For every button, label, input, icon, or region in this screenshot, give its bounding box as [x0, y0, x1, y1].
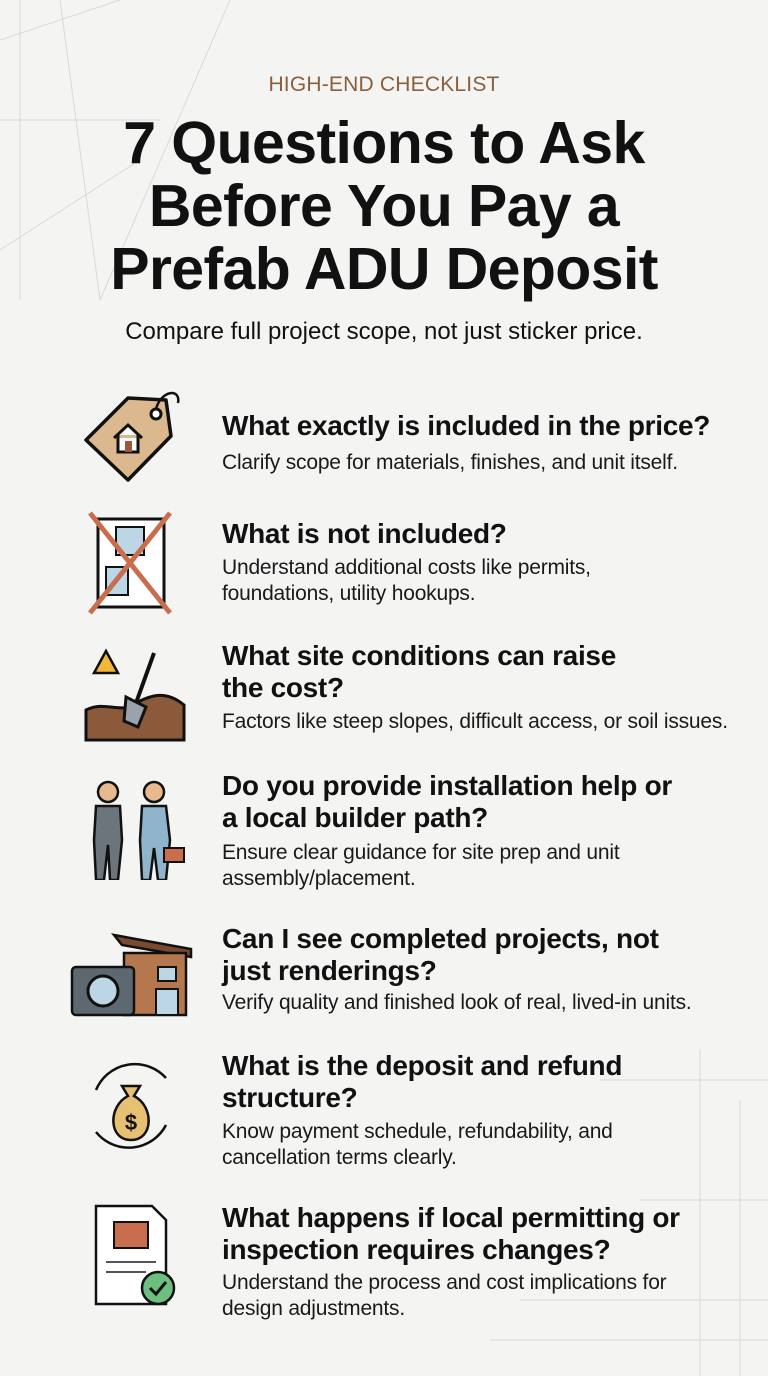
subtitle: Compare full project scope, not just sticker price. [125, 318, 643, 345]
icon: not included [88, 512, 172, 614]
item 5: Can I see completed projects, not [222, 923, 659, 954]
text: Understand the process and cost implications for [222, 1271, 666, 1294]
kicker: HIGH-END CHECKLIST [268, 73, 500, 96]
text: Understand additional costs like permits, [222, 556, 591, 579]
icon: site shovel [84, 648, 186, 742]
title: Prefab ADU Deposit [110, 236, 658, 302]
text: Factors like steep slopes, difficult access, or soil issues. [222, 710, 728, 733]
item 4: Do you provide installation help or [222, 770, 672, 801]
icon: money bag cycle: $ [125, 1110, 137, 1135]
item 5 [222, 923, 659, 986]
item 7 [222, 1202, 680, 1265]
item 3 [222, 640, 616, 703]
text: cancellation terms clearly. [222, 1146, 457, 1169]
text: Clarify scope for materials, finishes, and unit itself. [222, 451, 678, 474]
title [110, 110, 658, 302]
text: Ensure clear guidance for site prep and unit [222, 841, 619, 864]
text: Verify quality and finished look of real, lived-in units. [222, 991, 692, 1014]
item 2: What is not included? [222, 518, 507, 549]
title: 7 Questions to Ask [123, 110, 645, 176]
item 7: What happens if local permitting or [222, 1202, 680, 1233]
item 4 [222, 770, 672, 833]
item 6: structure? [222, 1082, 357, 1113]
item 7: inspection requires changes? [222, 1234, 610, 1265]
item 3: What site conditions can raise [222, 640, 616, 671]
item 6: What is the deposit and refund [222, 1050, 622, 1081]
item 6 [222, 1050, 622, 1113]
icon: camera and house [70, 933, 192, 1016]
item 5: just renderings? [222, 955, 437, 986]
text: foundations, utility hookups. [222, 582, 475, 605]
icon: installers [92, 780, 185, 880]
text: design adjustments. [222, 1297, 405, 1320]
icon: money bag cycle [94, 1062, 168, 1149]
title: Before You Pay a [149, 173, 619, 239]
item 1: What exactly is included in the price? [222, 410, 710, 441]
icon: permit document [94, 1204, 176, 1306]
icon: price tag [84, 392, 180, 482]
item 3: the cost? [222, 672, 344, 703]
item 4: a local builder path? [222, 802, 488, 833]
text: Know payment schedule, refundability, and [222, 1120, 613, 1143]
text: assembly/placement. [222, 867, 415, 890]
